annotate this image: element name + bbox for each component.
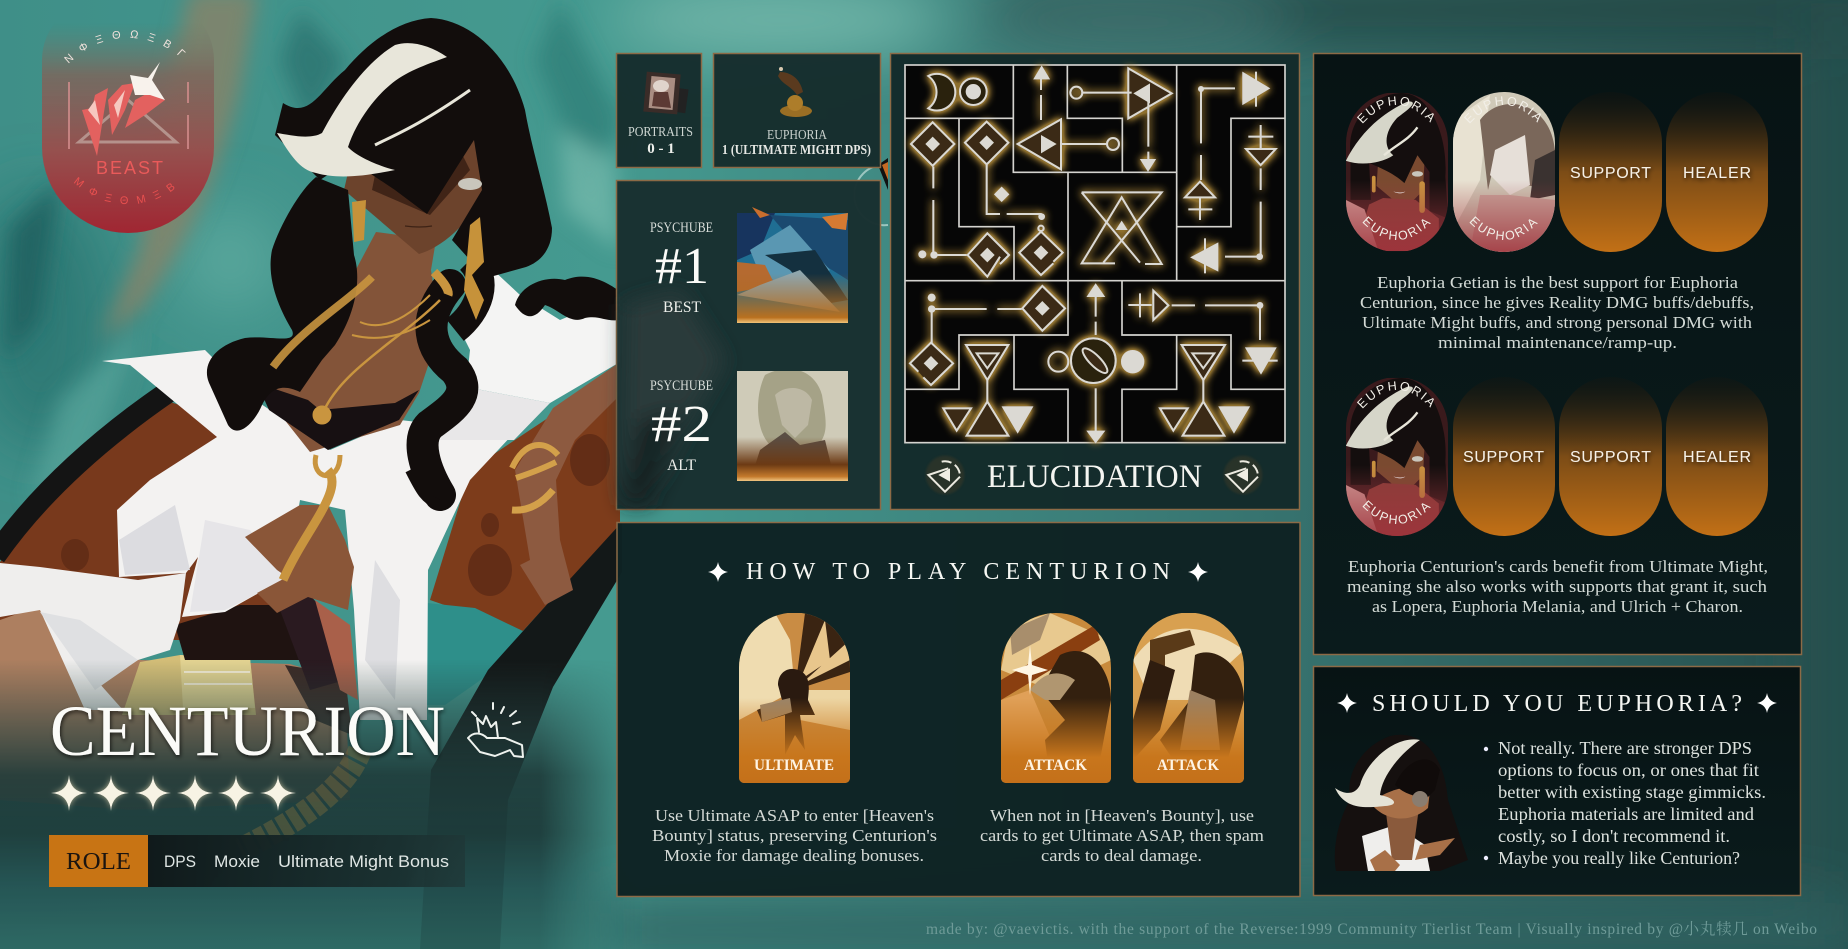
role bar: ROLE	[66, 849, 131, 875]
bottom fade	[0, 664, 622, 949]
panel: portraits	[616, 54, 702, 168]
card labels: ATTACK	[1157, 757, 1220, 774]
psychube 1 labels: PSYCHUBE	[650, 220, 713, 236]
role bar: DPS	[164, 852, 196, 871]
psychube 2 labels	[650, 378, 713, 474]
ghosted chair behind panel	[622, 290, 725, 505]
team two description: meaning she also works with supports that grant it, such	[1347, 577, 1768, 596]
psychube 2 art	[737, 369, 848, 481]
panel: euphoria: 1 (ULTIMATE MIGHT DPS)	[722, 143, 871, 158]
card: ultimate	[739, 613, 850, 783]
white coat	[0, 267, 620, 720]
ultimate description: Bounty] status, preserving Centurion's	[652, 826, 937, 845]
team one description: Ultimate Might buffs, and strong personal DMG with	[1362, 313, 1753, 332]
team one: healer slot: HEALER	[1683, 165, 1751, 182]
heading: HOW TO PLAY CENTURION	[746, 559, 1170, 585]
chest, neck and face	[257, 120, 488, 452]
psychube 2 labels: #2	[651, 396, 712, 453]
verdict bullet list: better with existing stage gimmicks.	[1498, 782, 1766, 802]
footer credit: made by: @vaevictis. with the support of the Reverse:1999 Community Tierlist Team | Visually inspired by @小丸犊几 on Weibo	[926, 920, 1817, 938]
chibi Centurion	[1335, 735, 1468, 871]
team one description: Centurion, since he gives Reality DMG buffs/debuffs,	[1360, 293, 1754, 312]
thigh and gold band	[0, 606, 352, 810]
psychube 1 art	[737, 207, 848, 323]
role bar: Ultimate Might Bonus	[278, 852, 449, 871]
team two: second support slot: SUPPORT	[1570, 449, 1651, 466]
team two description: Euphoria Centurion's cards benefit from Ultimate Might,	[1348, 557, 1768, 576]
team two: healer slot: HEALER	[1683, 449, 1751, 466]
card: attack one	[1001, 613, 1111, 783]
psychube 2 labels: PSYCHUBE	[650, 378, 713, 394]
right arm and bracelets	[512, 362, 620, 605]
team one: euphoria getian portrait	[1453, 92, 1555, 252]
team two description: as Lopera, Euphoria Melania, and Ulrich + Charon.	[1372, 597, 1743, 616]
card labels: ATTACK	[1024, 757, 1088, 774]
team one: support slot: SUPPORT	[1570, 165, 1651, 182]
verdict bullet list: options to focus on, or ones that fit	[1498, 760, 1759, 780]
elucidation puzzle grid	[905, 65, 1285, 443]
panel: should you euphoria	[1314, 666, 1800, 896]
class emblem: beast	[42, 30, 214, 233]
character: Centurion full-body art	[0, 18, 622, 949]
panel: elucidation	[890, 54, 1300, 510]
card: attack two	[1133, 613, 1244, 783]
psychube 1 labels	[650, 220, 713, 316]
attack description: cards to get Ultimate ASAP, then spam	[980, 826, 1264, 845]
psychube 1 labels: BEST	[663, 299, 701, 316]
team one description	[1360, 273, 1754, 352]
team one: euphoria getian portrait: EUPHORIA	[1470, 216, 1538, 240]
dark shorts and gloved hand	[175, 595, 358, 700]
verdict bullet list: Maybe you really like Centurion?	[1498, 848, 1740, 868]
team one: euphoria centurion portrait: EUPHORIA	[1356, 96, 1434, 124]
ultimate description: Moxie for damage dealing bonuses.	[664, 846, 924, 865]
midriff skin	[245, 505, 354, 613]
attack description: When not in [Heaven's Bounty], use	[990, 806, 1254, 825]
verdict bullet list: Euphoria materials are limited and	[1498, 804, 1754, 824]
icon: hand with sparkles	[468, 703, 523, 757]
gold earrings	[352, 200, 484, 320]
dim gold belt chain	[240, 750, 360, 850]
role bar: Moxie	[214, 852, 260, 871]
small background glimpse between panels	[854, 158, 888, 225]
panel: portraits: PORTRAITS	[628, 125, 693, 140]
rarity stars	[51, 775, 296, 811]
team two: healer slot	[1666, 377, 1768, 536]
psychube 1 labels: #1	[655, 238, 709, 295]
white hair streak	[277, 43, 447, 176]
icon: film portrait	[643, 72, 689, 114]
emblem rune rings: ΝΦΞΘΩΞΒΓ	[64, 30, 186, 64]
panel: psychube	[616, 180, 880, 510]
psychube 2 labels: ALT	[667, 457, 696, 474]
grid walls	[905, 65, 1285, 443]
card labels	[754, 757, 1220, 774]
emblem rune rings	[64, 30, 186, 204]
team one: euphoria getian portrait: EUPHORIA	[1464, 96, 1541, 123]
eye	[458, 178, 482, 190]
gold chain necklaces	[273, 272, 448, 580]
class label: BEAST	[96, 158, 163, 178]
team one description: minimal maintenance/ramp-up.	[1438, 333, 1677, 352]
panel: portraits: 0 - 1	[647, 141, 675, 157]
team two: euphoria centurion portrait: EUPHORIA	[1362, 500, 1431, 524]
icon: elucidation left	[926, 456, 964, 494]
team one: support slot	[1559, 92, 1662, 252]
team two: support slot	[1453, 377, 1555, 536]
verdict bullet list: Not really. There are stronger DPS	[1498, 738, 1752, 758]
team one: euphoria centurion portrait: EUPHORIA	[1362, 216, 1431, 240]
panel: teams	[1312, 52, 1802, 656]
team two: euphoria centurion portrait: EUPHORIA	[1356, 381, 1434, 408]
ultimate description: Use Ultimate ASAP to enter [Heaven's	[655, 806, 934, 825]
ultimate description	[652, 806, 937, 865]
emblem claw mark	[82, 62, 165, 156]
attack description	[980, 806, 1264, 865]
team one: euphoria centurion portrait	[1346, 93, 1448, 252]
team one description: Euphoria Getian is the best support for Euphoria	[1377, 273, 1738, 292]
panel: euphoria	[714, 54, 880, 168]
heading: SHOULD YOU EUPHORIA?	[1372, 691, 1742, 717]
puzzle glyphs	[910, 67, 1278, 442]
card labels: ULTIMATE	[754, 757, 834, 774]
verdict bullet list	[1484, 738, 1766, 868]
icon: golden hand	[778, 67, 812, 117]
team two description	[1347, 557, 1768, 616]
character name: CENTURION	[50, 691, 445, 771]
verdict bullet list: costly, so I don't recommend it.	[1498, 826, 1730, 846]
panel: how to play	[617, 522, 1300, 896]
icon: elucidation right	[1224, 456, 1262, 494]
team two: support slot: SUPPORT	[1463, 449, 1544, 466]
emblem rune rings: ΜΦΞΘΜΞΒ	[74, 177, 174, 204]
team one: healer slot	[1666, 92, 1768, 252]
team two: second support slot	[1559, 377, 1662, 536]
team two: euphoria centurion portrait	[1346, 378, 1448, 536]
elucidation label: ELUCIDATION	[987, 459, 1202, 495]
attack description: cards to deal damage.	[1041, 846, 1202, 865]
hair	[207, 18, 620, 505]
chair and cushion	[0, 370, 622, 949]
emblem triangle and side bars	[69, 82, 188, 149]
panel: euphoria: EUPHORIA	[767, 128, 828, 143]
role bar	[49, 835, 465, 887]
